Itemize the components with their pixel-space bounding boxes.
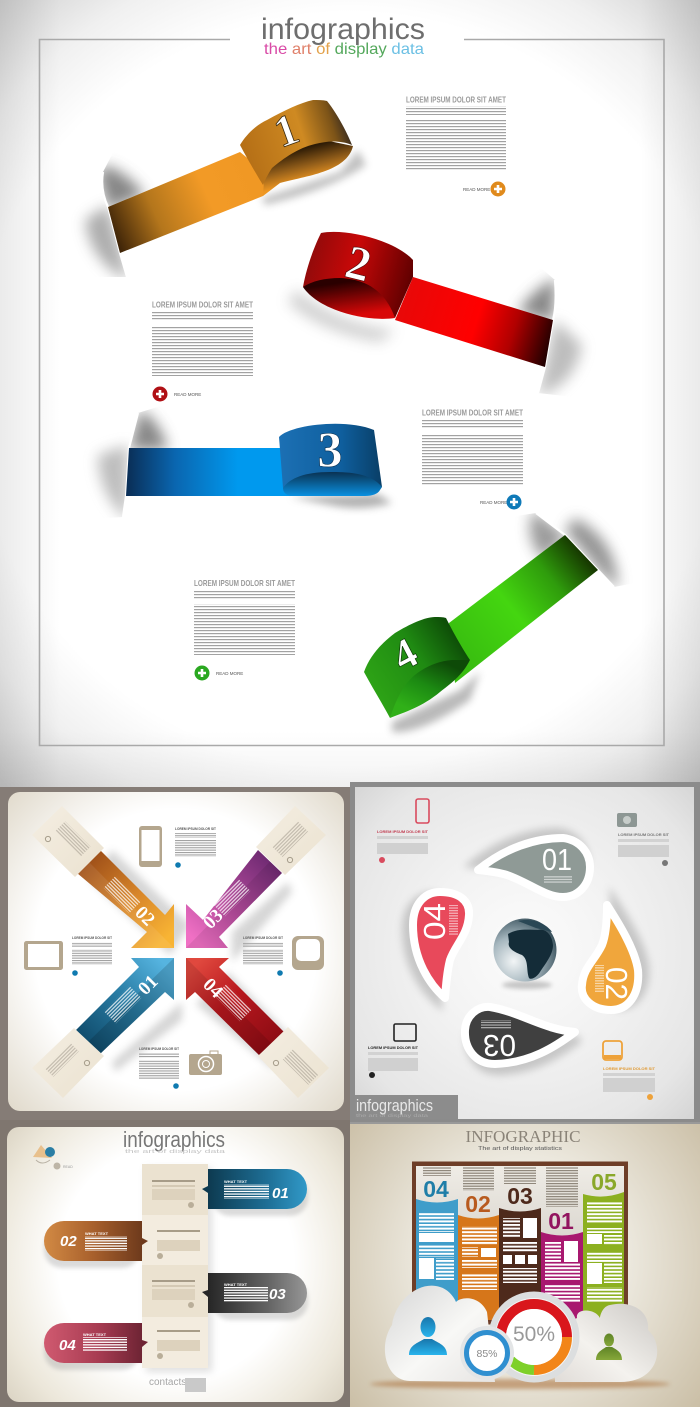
card text 3 xyxy=(152,1280,195,1308)
main title: infographics xyxy=(261,13,425,46)
column 02 xyxy=(458,1166,499,1320)
tab 04: WHAT TEXT xyxy=(83,1332,107,1337)
person green xyxy=(596,1334,622,1360)
column 01 xyxy=(541,1166,583,1320)
tab 02: WHAT TEXT xyxy=(85,1231,109,1236)
main panel background xyxy=(0,0,700,790)
label: infographics: infographics xyxy=(356,1097,433,1115)
text block 3: LOREM IPSUM DOLOR SIT AMET xyxy=(422,408,524,418)
text block 2 xyxy=(152,300,254,402)
panel: teardrops xyxy=(350,782,700,1123)
title: infographics xyxy=(123,1127,225,1152)
number 3: 3 xyxy=(318,421,342,477)
arrow 04 red: 04 xyxy=(199,974,227,1003)
tab 01 xyxy=(202,1169,308,1216)
text: bottom xyxy=(139,1047,180,1089)
text top right: LOREM IPSUM DOLOR SIT xyxy=(618,832,670,837)
person blue xyxy=(409,1317,447,1355)
ring 85% xyxy=(460,1326,514,1380)
tab 04: 04 xyxy=(59,1337,76,1354)
column 03 xyxy=(499,1166,541,1320)
text: left xyxy=(72,936,113,976)
arrow 02 orange: 02 xyxy=(131,902,159,930)
logo icon xyxy=(33,1145,73,1170)
icon: phone xyxy=(139,826,162,867)
main panel frame xyxy=(40,40,664,746)
tab 03: WHAT TEXT xyxy=(224,1282,248,1287)
ring 50% xyxy=(488,1292,580,1382)
column 03: 03 xyxy=(507,1183,533,1209)
drop 01: 01 xyxy=(542,842,572,877)
text bottom left: LOREM IPSUM DOLOR SIT xyxy=(368,1045,419,1050)
column 01: 01 xyxy=(548,1208,574,1234)
icon: tv orange xyxy=(603,1041,622,1060)
panel: cloud statistics xyxy=(350,1122,700,1407)
text: bottom: LOREM IPSUM DOLOR SIT xyxy=(139,1047,180,1051)
cloud right xyxy=(555,1304,657,1382)
icon: camera xyxy=(189,1051,222,1075)
arrow 04 red xyxy=(186,958,284,1055)
icon: phone red xyxy=(416,799,429,823)
globe xyxy=(494,918,556,989)
arrow shadows xyxy=(90,850,296,1072)
drop 04: 04 xyxy=(417,903,452,940)
subtitle: The art of display statistics xyxy=(478,1146,562,1152)
text block 4: LOREM IPSUM DOLOR SIT AMET xyxy=(194,578,296,588)
text: left: LOREM IPSUM DOLOR SIT xyxy=(72,936,113,940)
card top left xyxy=(32,806,104,877)
ring 50%: 50% xyxy=(513,1323,555,1346)
text top left: LOREM IPSUM DOLOR SIT xyxy=(377,829,429,834)
arrow 03 purple: 03 xyxy=(199,905,227,933)
column 05 xyxy=(583,1166,624,1320)
contacts xyxy=(149,1377,206,1392)
button 2: READ MORE xyxy=(174,392,201,397)
icon: camera gray xyxy=(617,813,637,827)
tab 01: WHAT TEXT xyxy=(224,1179,248,1184)
arrow 03 purple xyxy=(186,850,282,948)
button 4: READ MORE xyxy=(216,671,243,676)
tab 02: 02 xyxy=(60,1233,77,1250)
icon: tablet xyxy=(24,941,63,970)
icon: tv xyxy=(292,936,324,970)
drop 03: 03 xyxy=(483,1028,516,1063)
text bottom left xyxy=(368,1045,419,1078)
panel: four arrows xyxy=(0,787,350,1127)
text block 3 xyxy=(422,408,524,510)
column 05: 05 xyxy=(591,1169,617,1195)
text block 1: LOREM IPSUM DOLOR SIT AMET xyxy=(406,94,507,104)
card text 2 xyxy=(157,1230,200,1259)
text block 2: LOREM IPSUM DOLOR SIT AMET xyxy=(152,300,254,310)
ribbon 3: blue xyxy=(98,410,392,520)
drop 02 xyxy=(582,905,638,1010)
ribbon 4: green xyxy=(364,510,618,732)
text block 1 xyxy=(406,94,507,196)
number 4: 4 xyxy=(385,629,426,681)
column 02: 02 xyxy=(465,1191,491,1217)
column frame xyxy=(414,1163,626,1323)
column 04 xyxy=(416,1166,458,1316)
card bottom right xyxy=(258,1027,329,1098)
ribbon 2: red xyxy=(288,232,582,396)
contacts: contacts xyxy=(149,1377,186,1388)
ribbon 1: orange xyxy=(85,100,366,280)
card text 4 xyxy=(157,1330,200,1359)
ground shadow xyxy=(370,1379,670,1389)
text bottom right: LOREM IPSUM DOLOR SIT xyxy=(603,1066,656,1071)
drop 02: 02 xyxy=(599,967,634,1000)
card top right xyxy=(256,806,326,875)
text: right: LOREM IPSUM DOLOR SIT xyxy=(243,936,284,940)
label: infographics xyxy=(355,1095,458,1119)
title: the art of display data xyxy=(125,1149,227,1155)
button 3: READ MORE xyxy=(480,500,507,505)
text block 4 xyxy=(194,578,296,680)
text bottom right xyxy=(603,1066,656,1100)
arrow 01 blue xyxy=(76,958,174,1054)
drop shadows xyxy=(406,832,645,1071)
cloud left xyxy=(385,1286,495,1382)
panel: tabs xyxy=(0,1120,350,1407)
tab 04 xyxy=(44,1323,148,1370)
card bottom left xyxy=(32,1028,104,1098)
text top right xyxy=(618,832,670,866)
tab 02 xyxy=(44,1221,148,1268)
button 1: READ MORE xyxy=(463,187,490,192)
drop 03 xyxy=(465,1007,575,1064)
text: right xyxy=(243,936,284,976)
tab 01: 01 xyxy=(272,1185,289,1202)
ring 85%: 85% xyxy=(476,1348,498,1360)
text: top xyxy=(175,827,217,868)
drop 04 xyxy=(413,892,469,998)
tab 03 xyxy=(202,1273,308,1320)
label: infographics: the art of display data xyxy=(356,1113,429,1118)
center paper xyxy=(142,1164,212,1372)
drop 01 xyxy=(478,838,590,897)
subtitle: the art of display data xyxy=(264,41,424,58)
text: top: LOREM IPSUM DOLOR SIT xyxy=(175,827,217,831)
title: INFOGRAPHIC xyxy=(466,1127,580,1146)
icon: tablet black xyxy=(394,1024,416,1041)
number 1: 1 xyxy=(268,104,305,157)
column 04: 04 xyxy=(423,1176,449,1202)
card text 1 xyxy=(152,1180,195,1208)
text top left xyxy=(377,829,429,863)
tab 03: 03 xyxy=(269,1286,286,1303)
arrow 01 blue: 01 xyxy=(134,971,162,999)
arrow 02 orange xyxy=(77,850,174,948)
logo icon: READ xyxy=(63,1165,73,1169)
number 2: 2 xyxy=(340,235,376,292)
